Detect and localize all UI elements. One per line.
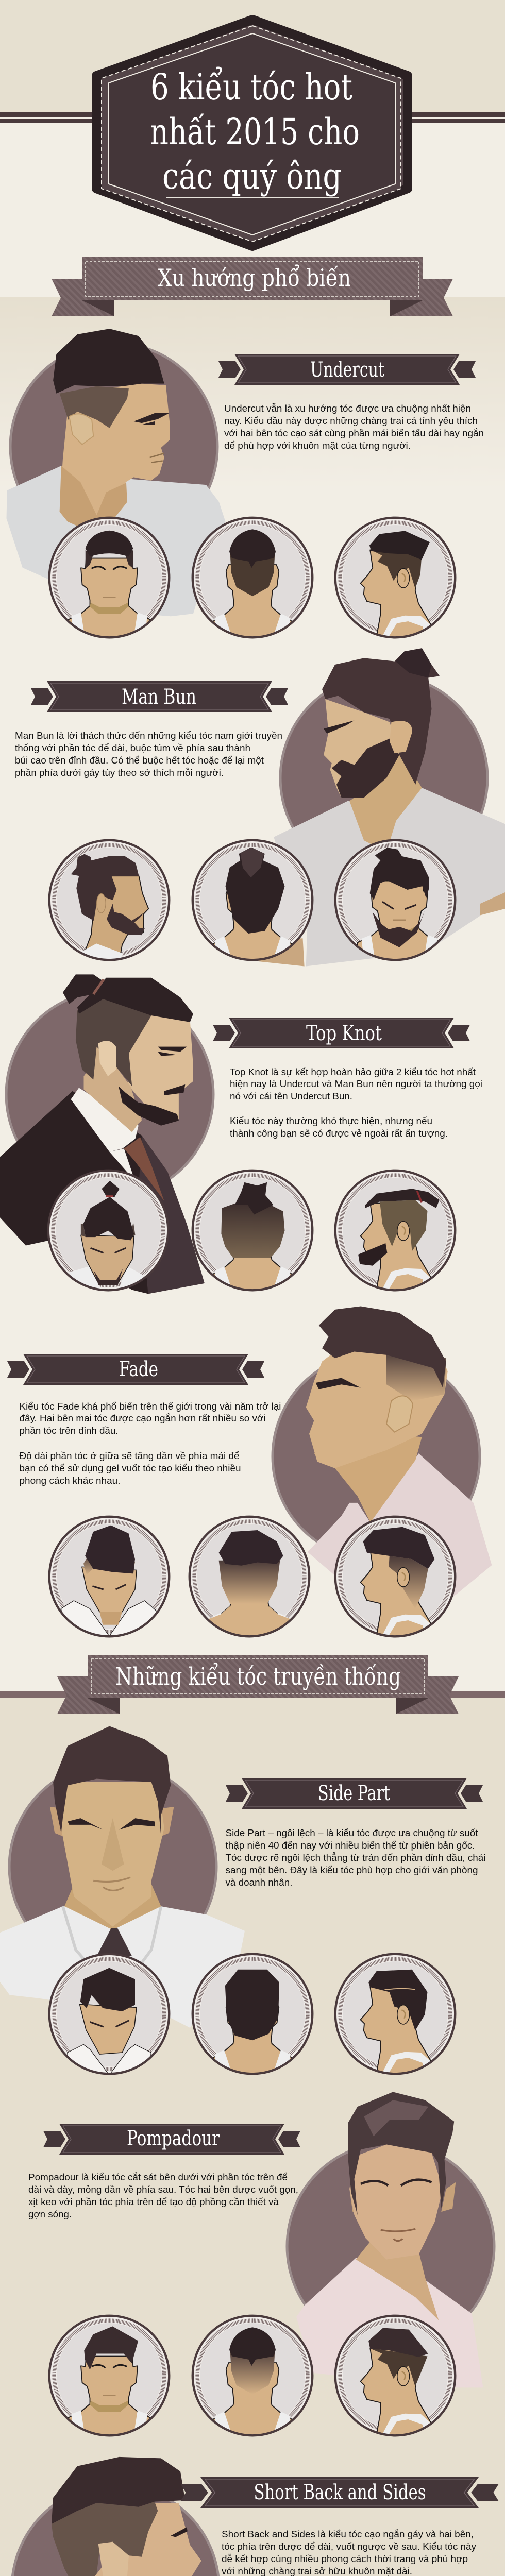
section ribbon: Xu hướng phổ biến: Xu hướng phổ biến xyxy=(158,264,351,292)
text: Undercut: nay. Kiểu đầu này được những chàng trai cá tính yêu thích xyxy=(224,416,478,426)
heading: Short Back and Sides: Short Back and Sides xyxy=(254,2481,426,2504)
text: Top Knot: Kiểu tóc này thường khó thực hiện, nhưng nếu xyxy=(230,1116,432,1126)
medallion: Side Part back xyxy=(193,1954,312,2077)
medallion: Pompadour side xyxy=(335,2316,455,2438)
text: Side Part xyxy=(226,1828,485,1888)
text: Man Bun: thống với phần tóc để dài, buộc túm về phía sau thành xyxy=(15,743,250,753)
medallion: Side Part front xyxy=(49,1954,169,2075)
text: Top Knot: Top Knot là sự kết hợp hoàn hảo giữa 2 kiểu tóc hot nhất xyxy=(230,1067,476,1077)
text: Top Knot: hiện nay là Undercut và Man Bun nên người ta thường gọi xyxy=(230,1079,482,1089)
text: Top Knot: thành công bạn sẽ có được vẻ ngoài rất ấn tượng. xyxy=(230,1128,448,1139)
text: Pompadour: dài và dày, mỏng dần về phía sau. Tóc hai bên được vuốt gọn, xyxy=(28,2184,298,2195)
text: Short Back and Sides: dễ kết hợp cùng nhiều phong cách thời trang và phù hợp xyxy=(222,2553,468,2564)
title badge: các quý ông xyxy=(162,155,342,197)
text: Pompadour: gợn sóng. xyxy=(28,2209,72,2219)
heading: Man Bun: Man Bun xyxy=(122,685,196,709)
text: Short Back and Sides: Short Back and Sides là kiểu tóc cạo ngắn gáy và hai bên, xyxy=(222,2529,474,2539)
text: Top Knot xyxy=(230,1067,482,1139)
text: Fade: phần tóc trên đỉnh đầu. xyxy=(20,1426,119,1436)
heading: Undercut: Undercut xyxy=(310,358,384,382)
medallion: Pompadour back xyxy=(193,2316,312,2438)
text: Fade: Kiểu tóc Fade khá phổ biến trên thế giới trong vài năm trở lại xyxy=(20,1401,281,1412)
medallion: Fade back xyxy=(190,1517,309,1639)
heading: Undercut xyxy=(218,354,476,385)
medallion: Undercut side xyxy=(335,518,455,640)
heading: Side Part: Side Part xyxy=(318,1782,390,1805)
text: Pompadour xyxy=(28,2172,298,2219)
medallion: Side Part side xyxy=(335,1954,455,2077)
medallion: Undercut front xyxy=(49,518,169,640)
title badge: nhất 2015 cho xyxy=(150,111,360,153)
medallion: Fade side xyxy=(335,1517,455,1639)
text: Undercut: với hai bên tóc cạo sát cùng phần mái biến tấu dài hay ngắn xyxy=(224,428,484,438)
figure: Undercut xyxy=(6,329,226,616)
medallion: Man Bun front xyxy=(335,840,455,963)
title badge xyxy=(96,20,408,246)
heading: Pompadour: Pompadour xyxy=(127,2127,220,2150)
figure: Short Back and Sides xyxy=(12,2457,219,2576)
heading: Man Bun xyxy=(31,681,288,712)
text: Undercut xyxy=(224,403,484,451)
section ribbon: Những kiểu tóc truyền thống xyxy=(57,1655,459,1714)
text: Fade: đây. Hai bên mai tóc được cạo ngắn hơn rất nhiều so với xyxy=(20,1413,266,1423)
medallion: Fade front xyxy=(49,1517,169,1638)
text: Fade: Độ dài phần tóc ở giữa sẽ tăng dần về phía mái để xyxy=(20,1451,239,1461)
text: Pompadour: xịt keo với phần tóc phía trên để tạo độ phồng cần thiết và xyxy=(28,2197,279,2207)
medallion: Top Knot front xyxy=(48,1171,168,1292)
medallion: Undercut back xyxy=(193,518,312,640)
text: Side Part: và doanh nhân. xyxy=(226,1877,293,1888)
medallion: Pompadour front xyxy=(49,2316,169,2438)
text: Man Bun xyxy=(15,731,282,778)
text: Man Bun: Man Bun là lời thách thức đến những kiểu tóc nam giới truyền xyxy=(15,731,282,741)
figure: Man Bun xyxy=(226,648,505,966)
text: Fade: bạn có thể sử dụng gel vuốt tóc tạo kiểu theo nhiều xyxy=(20,1463,241,1473)
medallion: Top Knot side xyxy=(335,1171,455,1293)
text: Pompadour: Pompadour là kiểu tóc cắt sát bên dưới với phần tóc trên để xyxy=(28,2172,288,2182)
text: Fade xyxy=(20,1401,281,1486)
text: Man Bun: búi cao trên đỉnh đầu. Có thể buộc hết tóc hoặc để lại một xyxy=(15,755,264,766)
heading: Short Back and Sides xyxy=(181,2477,498,2508)
heading: Fade xyxy=(7,1354,264,1385)
section ribbon: Xu hướng phổ biến xyxy=(52,257,453,316)
heading: Side Part xyxy=(226,1778,483,1809)
text: Man Bun: phần phía dưới gáy tùy theo sở thích mỗi người. xyxy=(15,767,224,778)
text: Top Knot: nó với cái tên Undercut Bun. xyxy=(230,1091,352,1101)
text: Fade: phong cách khác nhau. xyxy=(20,1476,121,1486)
figure: Top Knot xyxy=(0,974,213,1294)
heading: Fade: Fade xyxy=(119,1358,158,1381)
text: Side Part: thập niên 40 đến nay với nhiều biến thể từ phiên bản gốc. xyxy=(226,1840,475,1851)
text: Short Back and Sides xyxy=(222,2529,476,2576)
section ribbon: Những kiểu tóc truyền thống: Những kiểu tóc truyền thống xyxy=(115,1663,401,1691)
text: Undercut: để phù hợp với khuôn mặt của từng người. xyxy=(224,440,411,451)
medallion: Man Bun side xyxy=(49,840,169,960)
heading: Top Knot xyxy=(213,1018,470,1048)
figure: Side Part xyxy=(0,1726,245,2028)
text: Short Back and Sides: tóc phía trên được để dài, vuốt ngược về sau. Kiểu tóc này xyxy=(222,2541,476,2552)
heading: Top Knot: Top Knot xyxy=(306,1022,382,1045)
figure: Pompadour xyxy=(287,2092,494,2387)
text: Side Part: Tóc được rẽ ngôi lệch thẳng từ trán đến phần đỉnh đầu, chải xyxy=(226,1852,485,1863)
title badge: 6 kiểu tóc hot xyxy=(150,66,352,108)
heading: Pompadour xyxy=(43,2124,300,2155)
figure: Fade xyxy=(273,1306,492,1621)
text: Side Part: Side Part – ngôi lệch – là kiểu tóc được ưa chuộng từ suốt xyxy=(226,1828,478,1838)
text: Side Part: sang một bên. Đây là kiểu tóc phù hợp cho giới văn phòng xyxy=(226,1865,478,1875)
medallion: Man Bun back xyxy=(193,840,312,963)
medallion: Top Knot back xyxy=(193,1171,312,1293)
text: Undercut: Undercut vẫn là xu hướng tóc được ưa chuộng nhất hiện xyxy=(224,403,471,414)
